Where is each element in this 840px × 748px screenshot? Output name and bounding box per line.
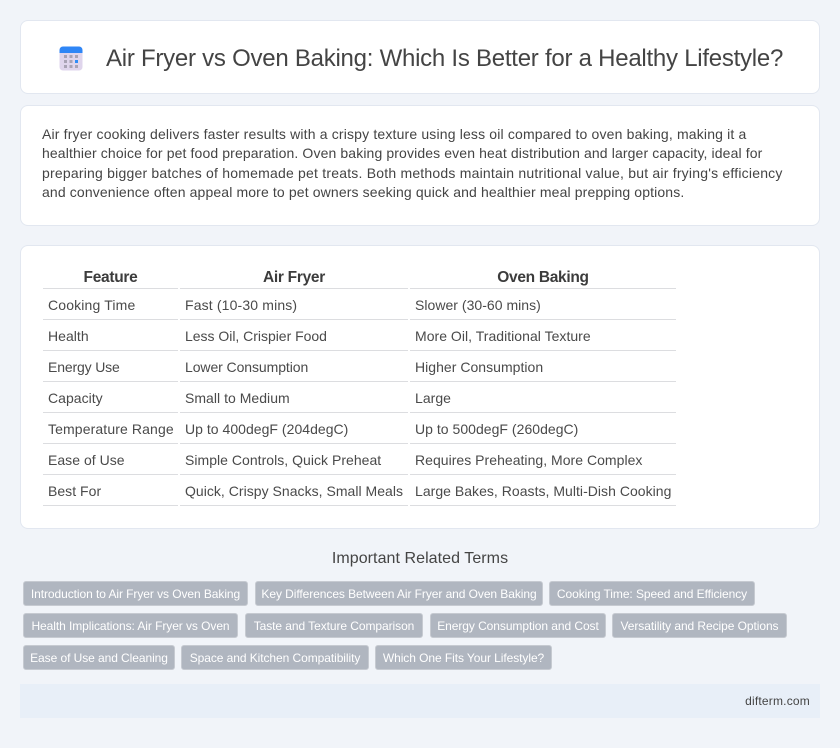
tag: Versatility and Recipe Options <box>620 619 778 633</box>
tag <box>430 613 606 638</box>
tag: Health Implications: Air Fryer vs Oven <box>31 619 230 633</box>
row: temperature range <box>48 421 578 437</box>
tag <box>245 613 423 638</box>
tag: Space and Kitchen Compatibility <box>190 651 360 665</box>
row: cooking time: Fast (10-30 mins) <box>185 297 297 313</box>
comparison table <box>43 269 676 506</box>
row: ease of use: Requires Preheating, More Complex <box>415 452 642 468</box>
row: capacity <box>48 390 451 406</box>
tag: Ease of Use and Cleaning <box>30 651 168 665</box>
tag <box>255 581 543 606</box>
intro text panel <box>20 105 820 226</box>
row: ease of use: Simple Controls, Quick Preheat <box>185 452 381 468</box>
row: cooking time <box>48 297 541 313</box>
row: capacity: Small to Medium <box>185 390 290 406</box>
row: temperature range: Temperature Range <box>48 421 174 437</box>
row: energy use: Energy Use <box>48 359 120 375</box>
tag: Cooking Time: Speed and Efficiency <box>557 587 747 601</box>
row: cooking time: Slower (30-60 mins) <box>415 297 541 313</box>
row: energy use: Higher Consumption <box>415 359 543 375</box>
row: temperature range: Up to 400degF (204degC) <box>185 421 348 437</box>
icon: calendar <box>60 46 82 70</box>
tag: Introduction to Air Fryer vs Oven Baking <box>31 587 240 601</box>
intro paragraph: Air fryer cooking delivers faster results with a crispy texture using less oil compared to oven baking, making it a <box>42 126 746 142</box>
column headers: Air Fryer <box>263 269 325 286</box>
intro paragraph: and convenience often appeal more to pet owners seeking quick and healthier meal prepping options. <box>42 184 684 200</box>
tag: Energy Consumption and Cost <box>437 619 599 633</box>
row: health: More Oil, Traditional Texture <box>415 328 591 344</box>
tag <box>612 613 787 638</box>
row: best for: Best For <box>48 483 101 499</box>
tag <box>375 645 552 670</box>
footer bar <box>20 684 820 718</box>
row: temperature range: Up to 500degF (260degC) <box>415 421 578 437</box>
intro paragraph <box>42 126 783 200</box>
tag: Which One Fits Your Lifestyle? <box>383 651 544 665</box>
tag <box>23 581 248 606</box>
row: health: Less Oil, Crispier Food <box>185 328 327 344</box>
title: Air Fryer vs Oven Baking: Which Is Better for a Healthy Lifestyle? <box>106 45 783 72</box>
row: energy use <box>48 359 543 375</box>
row: cooking time: Cooking Time <box>48 297 135 313</box>
row: health: Health <box>48 328 89 344</box>
footer source: difterm.com <box>745 694 810 708</box>
intro paragraph: healthier choice for pet food preparation. Oven baking provides even heat distribution and larger capacity, ideal for <box>42 145 762 161</box>
row: best for <box>48 483 671 499</box>
tag <box>23 613 238 638</box>
tag <box>549 581 755 606</box>
tag <box>23 645 175 670</box>
tag: Key Differences Between Air Fryer and Oven Baking <box>261 587 537 601</box>
row: best for: Quick, Crispy Snacks, Small Meals <box>185 483 403 499</box>
intro paragraph: preparing bigger batches of homemade pet treats. Both methods maintain nutritional value, but air frying's efficiency <box>42 165 783 181</box>
related terms heading: Important Related Terms <box>332 550 508 567</box>
comparison table panel <box>20 245 820 529</box>
row: best for: Large Bakes, Roasts, Multi-Dish Cooking <box>415 483 671 499</box>
row: ease of use: Ease of Use <box>48 452 125 468</box>
row: capacity: Capacity <box>48 390 103 406</box>
column headers <box>84 269 589 286</box>
tag: Taste and Texture Comparison <box>254 619 414 633</box>
row: health <box>48 328 591 344</box>
tag <box>181 645 369 670</box>
related terms tags <box>23 581 787 670</box>
column headers: Oven Baking <box>497 269 589 286</box>
header panel <box>20 20 820 94</box>
row: capacity: Large <box>415 390 451 406</box>
row: ease of use <box>48 452 642 468</box>
column headers: Feature <box>84 269 137 286</box>
row: energy use: Lower Consumption <box>185 359 308 375</box>
